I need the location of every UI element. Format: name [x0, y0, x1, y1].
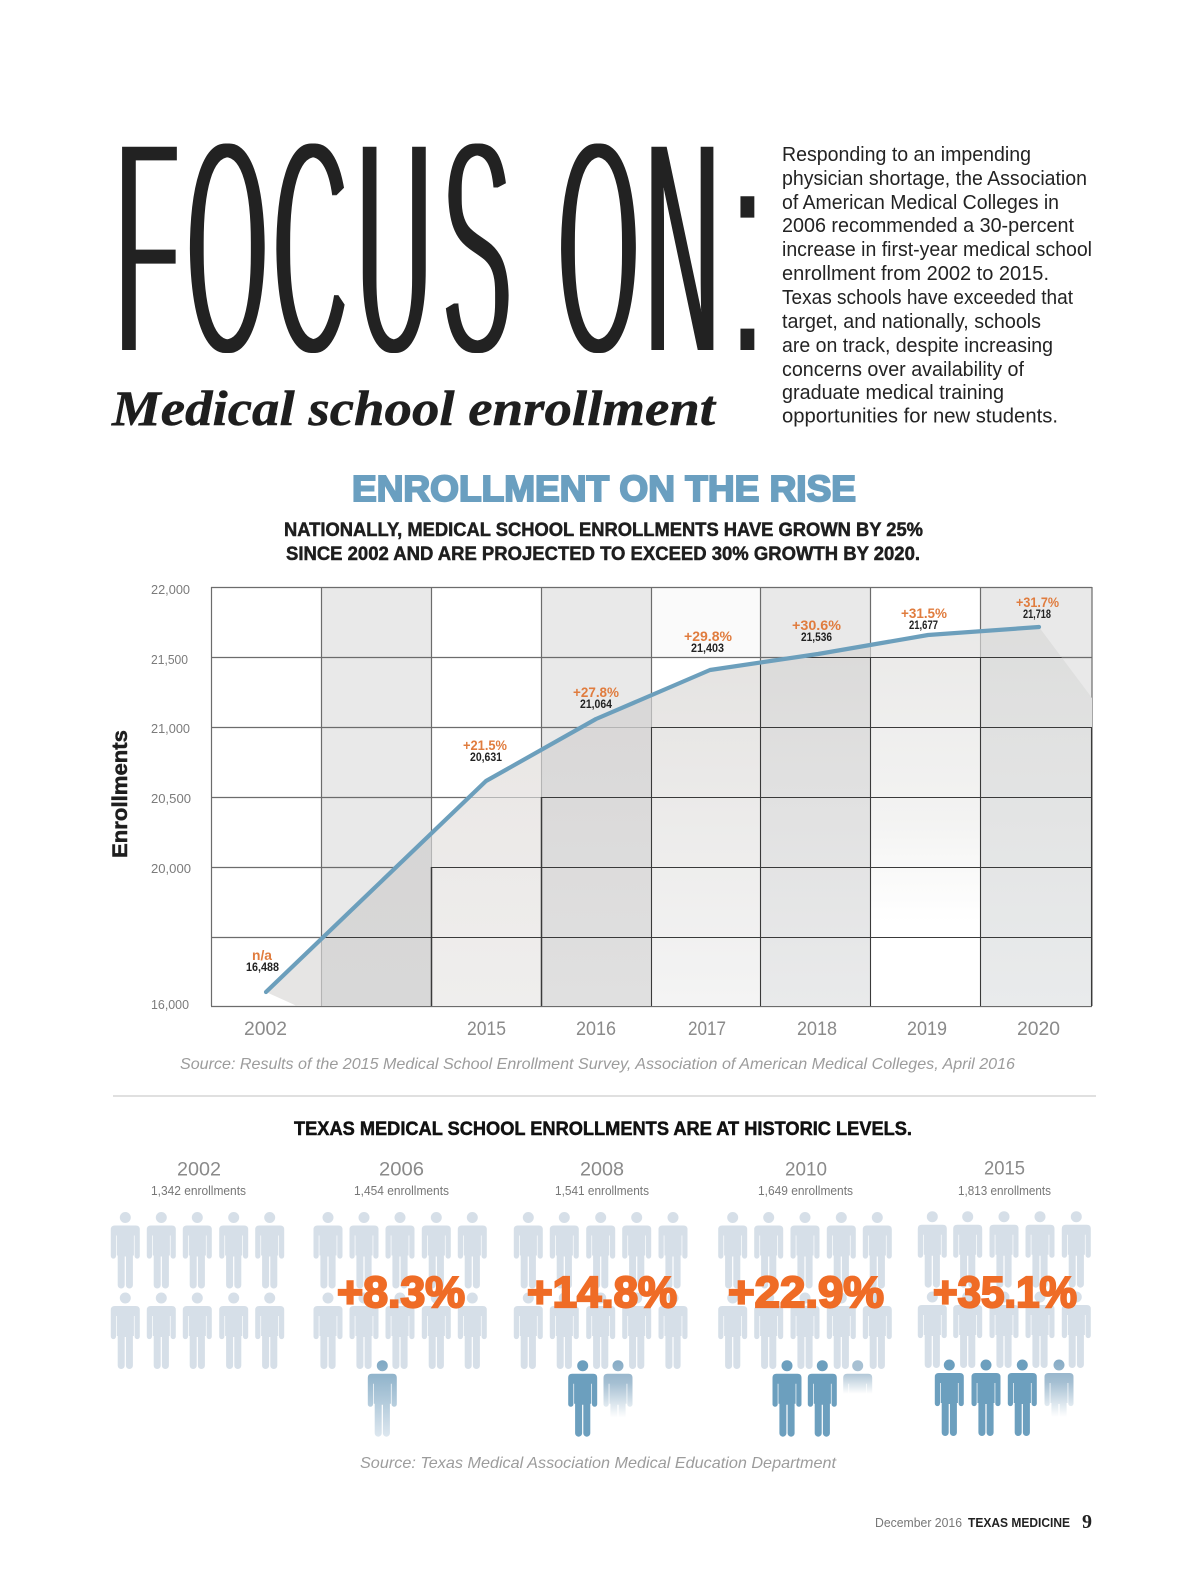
panel: Texas 2008: 1,541 enrollments	[555, 1183, 649, 1198]
axis title: Enrollments: Enrollments	[109, 730, 132, 858]
panel: Texas 2002: 1,342 enrollments	[151, 1183, 246, 1198]
data labels: 20,631	[470, 752, 503, 764]
data labels: 21,536	[801, 632, 832, 644]
x axis years: 2016	[576, 1019, 616, 1040]
line chart: national enrollments	[211, 587, 1092, 1006]
y axis labels	[151, 582, 191, 1012]
icon: people 2015	[918, 1211, 1091, 1436]
section heading: Texas enrollments: TEXAS MEDICAL SCHOOL ENROLLMENTS ARE AT HISTORIC LEVELS.	[294, 1119, 912, 1140]
panel: Texas 2015: 2015	[984, 1158, 1025, 1180]
section heading: enrollment on the rise: ENROLLMENT ON THE RISE	[352, 468, 856, 509]
intro paragraph: concerns over availability of	[782, 359, 1024, 381]
x axis years: 2019	[907, 1019, 947, 1040]
intro paragraph: target, and nationally, schools	[782, 311, 1041, 333]
source: national data: Source: Results of the 2015 Medical School Enrollment Survey, Association of American Medical Colleges, April 2016	[180, 1056, 1015, 1073]
intro paragraph: Texas schools have exceeded that	[782, 287, 1073, 309]
data labels: +21.5%	[463, 737, 508, 753]
panel: Texas 2006: 1,454 enrollments	[354, 1183, 449, 1198]
callout: +35.1%: +35.1%	[933, 1268, 1077, 1317]
intro paragraph: graduate medical training	[782, 382, 1004, 404]
data labels: 21,403	[691, 643, 724, 655]
panel: Texas 2008: 2008	[580, 1160, 624, 1180]
intro paragraph: opportunities for new students.	[782, 406, 1058, 428]
subtitle: Medical school enrollment	[111, 380, 717, 436]
panel: Texas 2010: 1,649 enrollments	[758, 1183, 853, 1198]
intro paragraph	[782, 144, 1092, 428]
national growth statement	[284, 520, 923, 565]
data labels: n/a	[252, 947, 272, 963]
footer: TEXAS MEDICINE	[968, 1515, 1070, 1530]
panel: Texas 2006	[314, 1160, 487, 1437]
y axis labels: 20,500	[151, 791, 191, 806]
y axis labels: 16,000	[151, 997, 189, 1012]
data labels: +31.5%	[901, 605, 948, 621]
intro paragraph: enrollment from 2002 to 2015.	[782, 263, 1049, 285]
icon: people 2008	[514, 1212, 688, 1437]
x axis years: 2018	[797, 1019, 837, 1040]
data labels: +29.8%	[684, 628, 733, 644]
source: Texas data: Source: Texas Medical Association Medical Education Department	[360, 1455, 837, 1472]
intro paragraph: are on track, despite increasing	[782, 335, 1053, 357]
panel: Texas 2015: 1,813 enrollments	[958, 1183, 1051, 1198]
panel: Texas 2010	[718, 1160, 892, 1437]
intro paragraph: Responding to an impending	[782, 144, 1031, 166]
alternating column shading	[321, 587, 1092, 1006]
callout: +8.3%: +8.3%	[337, 1268, 465, 1317]
footer: 9	[1082, 1511, 1092, 1533]
x axis years: 2015	[467, 1019, 506, 1040]
data labels: +30.6%	[792, 617, 842, 633]
icon: people 2010	[718, 1212, 892, 1437]
callout: +14.8%: +14.8%	[527, 1268, 677, 1317]
intro paragraph: of American Medical Colleges in	[782, 192, 1059, 214]
y axis labels: 20,000	[151, 861, 191, 876]
icon: people 2002	[111, 1212, 284, 1369]
x axis years: 2002	[244, 1019, 287, 1040]
data labels	[246, 594, 1059, 974]
title: FOCUS ON: FOCUS ON:	[116, 75, 762, 421]
panel: Texas 2002: 2002	[177, 1160, 221, 1180]
x axis years: 2020	[1017, 1019, 1060, 1040]
footer	[875, 1511, 1092, 1533]
y axis labels: 21,000	[151, 721, 190, 736]
national growth statement: NATIONALLY, MEDICAL SCHOOL ENROLLMENTS HAVE GROWN BY 25%	[284, 520, 923, 541]
panel: Texas 2008	[514, 1160, 688, 1437]
panel: Texas 2015	[918, 1158, 1091, 1436]
y axis labels: 21,500	[151, 652, 188, 667]
enrollment line	[266, 627, 1039, 992]
intro paragraph: increase in first-year medical school	[782, 239, 1092, 261]
data labels: 21,064	[580, 699, 613, 711]
data labels: 21,677	[909, 620, 938, 632]
data labels: +27.8%	[573, 684, 620, 700]
intro paragraph: physician shortage, the Association	[782, 168, 1087, 190]
panel: Texas 2006: 2006	[379, 1160, 424, 1180]
x axis years	[244, 1019, 1060, 1040]
panel: Texas 2002	[111, 1160, 284, 1369]
shaded area under the line	[268, 629, 1092, 1006]
data labels: +31.7%	[1016, 594, 1059, 610]
data labels: 16,488	[246, 962, 280, 974]
icon: people 2006	[314, 1212, 487, 1437]
panel: Texas 2010: 2010	[785, 1160, 827, 1180]
intro paragraph: 2006 recommended a 30-percent	[782, 215, 1074, 237]
data labels: 21,718	[1023, 609, 1051, 621]
national growth statement: SINCE 2002 AND ARE PROJECTED TO EXCEED 30% GROWTH BY 2020.	[286, 544, 920, 565]
y axis labels: 22,000	[151, 582, 190, 597]
callout: +22.9%: +22.9%	[728, 1268, 884, 1317]
x axis years: 2017	[688, 1019, 726, 1040]
footer: December 2016	[875, 1515, 962, 1530]
